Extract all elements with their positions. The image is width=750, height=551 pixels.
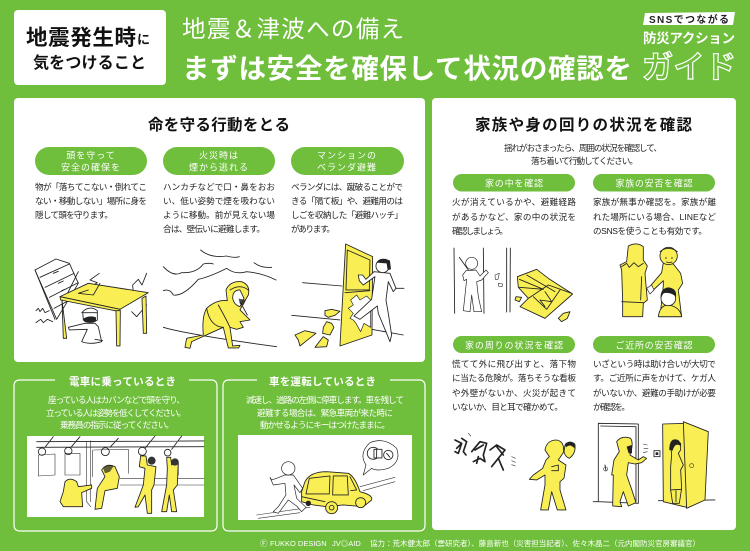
- logo: SNS action guide: [642, 12, 736, 85]
- text: protect head: 隠して頭を守ります。: [35, 209, 113, 220]
- text: fire: ハンカチなどで口・鼻をおお: [163, 181, 275, 192]
- illustration: checking neighbours: [593, 422, 715, 508]
- illustration: family: [620, 244, 683, 317]
- footer credits: JV◎AID: [332, 539, 361, 548]
- text: around the home: 慌てて外に飛び出すと、落下物: [452, 358, 576, 369]
- header heading: [182, 16, 632, 84]
- pill: apartment: [291, 147, 404, 175]
- pill: apartment: ベランダ避難: [317, 162, 377, 172]
- heading: protect life: 命を守る行動をとる: [148, 116, 290, 134]
- text: train advice: 乗務員の指示に従ってください。: [60, 419, 174, 430]
- title box: 気をつけること: [33, 53, 146, 72]
- heading: family and surroundings: 家族や身の回りの状況を確認: [475, 115, 692, 134]
- text: train advice: 座っている人はカバンなどで頭を守り、: [48, 395, 185, 405]
- pill: fire: 煙から逃れる: [189, 162, 249, 172]
- footer credits: FUKKO DESIGN: [270, 539, 327, 548]
- text: apartment: があります。: [291, 223, 335, 234]
- panel: on a train: 電車に乗っているとき: [69, 375, 176, 388]
- header heading: まずは安全を確保して状況の確認を: [182, 53, 632, 84]
- text: driving advice: 避難する場合は、緊急車両が来た時に: [257, 407, 393, 418]
- text: neighbours: いざという時は助け合いが大切で: [593, 358, 716, 369]
- text: train advice: [46, 395, 186, 430]
- text: family safety: 家族が無事か確認を。家族が離: [593, 196, 716, 207]
- text: inside the home: 確認しましょう。: [452, 225, 508, 236]
- panel: driving a car: 車を運転しているとき: [269, 375, 376, 388]
- illustration: train: [27, 436, 204, 517]
- text: inside the home: [452, 196, 576, 236]
- pill: inside the home: 家の中を確認: [485, 178, 543, 188]
- pill: family safety: [593, 174, 715, 192]
- logo: SNS action guide: 防災アクション: [643, 30, 735, 46]
- text: apartment: [291, 181, 403, 234]
- panel: protect your life: [14, 98, 425, 362]
- text: around the home: [452, 358, 576, 412]
- text: around the home: に当たる危険が。落ちそうな看板: [452, 372, 576, 383]
- logo: SNS action guide: ガイド: [642, 50, 736, 85]
- text: family safety: のSNSを使うことも有効です。: [593, 225, 707, 236]
- title box: 地震発生時: [26, 26, 136, 50]
- pill: fire: 火災時は: [199, 150, 239, 160]
- title box: [14, 10, 166, 85]
- footer credits: Ⓕ: [260, 539, 268, 548]
- text: fire: い、低い姿勢で煙を吸わない: [163, 195, 275, 206]
- pill: protect head: 安全の確保を: [61, 162, 121, 172]
- text: apartment: きる「隔て板」や、避難用のは: [291, 195, 403, 206]
- text: protect head: [35, 181, 147, 220]
- text: driving advice: 動かせるようにキーはつけたままに。: [260, 420, 390, 430]
- pill: protect head: [35, 147, 147, 175]
- pill: neighbours: ご近所の安否確認: [616, 340, 692, 350]
- text: fire: 合は、壁伝いに避難します。: [163, 223, 265, 234]
- pill: inside the home: [453, 174, 575, 192]
- pill: neighbours: [593, 336, 715, 353]
- text: driving advice: [246, 394, 404, 430]
- illustration: car: [238, 435, 412, 520]
- panel: on a train: [14, 375, 217, 531]
- pill: around the home: [453, 336, 575, 353]
- text: inside the home: 火が消えているかや、避難経路: [452, 196, 576, 207]
- pill: apartment: マンションの: [317, 150, 377, 160]
- text: neighbours: か確認を。: [593, 401, 630, 412]
- text: fire: [163, 181, 275, 234]
- logo: SNS action guide: SNSでつながる: [649, 13, 729, 26]
- text: neighbours: [593, 358, 716, 412]
- illustration: checking inside: [454, 248, 573, 322]
- text: around the home: や外壁がないか、火災が起きて: [452, 387, 576, 398]
- illustration: kick balcony partition: [292, 244, 404, 347]
- text: neighbours: す。ご近所に声をかけて、ケガ人: [593, 372, 716, 383]
- text: fire: ように移動。前が見えない場: [163, 209, 275, 220]
- text: protect head: ない・移動しない」場所に身を: [35, 195, 147, 206]
- pill: fire: [163, 147, 275, 175]
- pill: family safety: 家族の安否を確認: [616, 178, 692, 188]
- text: apartment: しごを収納した「避難ハッチ」: [291, 209, 403, 220]
- illustration: escaping smoke: [163, 250, 277, 348]
- text: family safety: れた場所にいる場合、LINEなど: [593, 211, 716, 222]
- text: neighbours: がいないか、避難の手助けが必要: [593, 387, 716, 398]
- illustration: checking outside: [455, 433, 575, 510]
- text: inside the home: があるかなど、家の中の状況を: [452, 211, 576, 222]
- text: around the home: いないか、目と耳で確かめて。: [452, 401, 563, 412]
- footer credits: 協力：荒木健太郎（雲研究者）、藤島新也（災害担当記者）、佐々木晶二（元内閣防災官房審議官）: [370, 538, 700, 548]
- illustration: under table: [35, 259, 148, 346]
- text: train advice: 立っている人は姿勢を低くしてください。: [46, 407, 186, 418]
- pill: around the home: 家の周りの状況を確認: [465, 340, 563, 350]
- intro text: [504, 142, 662, 166]
- text: apartment: ベランダには、蹴破ることがで: [291, 181, 403, 192]
- text: protect head: 物が「落ちてこない・倒れてこ: [35, 181, 147, 192]
- panel: confirm family and surroundings: [432, 98, 736, 530]
- text: family safety: [593, 196, 716, 236]
- panel: driving a car: [223, 375, 425, 531]
- pill: protect head: 頭を守って: [66, 150, 116, 160]
- intro text: 落ち着いて行動してください。: [531, 155, 638, 166]
- intro text: 揺れがおさまったら、周囲の状況を確認して、: [504, 142, 662, 153]
- title box: に: [137, 32, 150, 47]
- text: driving advice: 減速し、道路の左側に停車します。車を残して: [246, 394, 404, 405]
- header heading: 地震＆津波への備え: [182, 16, 404, 42]
